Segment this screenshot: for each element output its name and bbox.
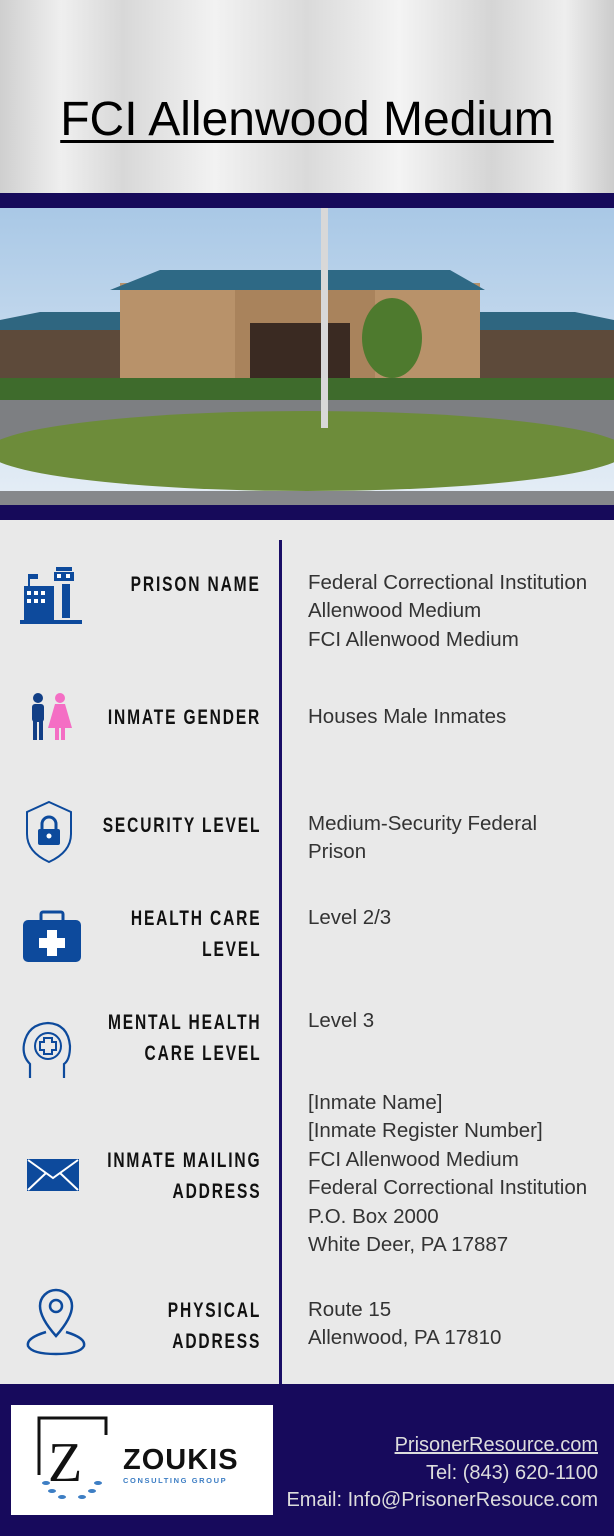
label: physical address bbox=[168, 1299, 261, 1353]
label: mental health care level: CARE LEVEL bbox=[144, 1042, 261, 1065]
value: mailing address: FCI Allenwood Medium bbox=[308, 1148, 519, 1171]
value: mental health: Level 3 bbox=[308, 1009, 374, 1032]
contact info: PrisonerResource.com bbox=[395, 1434, 598, 1456]
icon: envelope bbox=[27, 1159, 79, 1191]
logo emblem: Z bbox=[48, 1432, 82, 1494]
icon: mental health head bbox=[22, 1022, 72, 1078]
contact info: Email: Info@PrisonerResouce.com bbox=[286, 1489, 598, 1511]
label: inmate gender: INMATE GENDER bbox=[108, 706, 261, 729]
logo box bbox=[11, 1405, 273, 1515]
value: mailing address: Federal Correctional Institution bbox=[308, 1176, 587, 1199]
label: health care level: HEALTH CARE bbox=[130, 907, 261, 930]
value: physical address: Route 15 bbox=[308, 1298, 391, 1321]
icon: gender bbox=[32, 693, 72, 740]
value: physical address: Allenwood, PA 17810 bbox=[308, 1326, 501, 1349]
contact info bbox=[286, 1434, 598, 1511]
label: health care level bbox=[130, 907, 261, 961]
value: mailing address: [Inmate Register Number] bbox=[308, 1119, 543, 1142]
icon: medical kit bbox=[23, 910, 81, 962]
label: inmate mailing address: ADDRESS bbox=[172, 1180, 261, 1203]
value: mailing address: P.O. Box 2000 bbox=[308, 1205, 439, 1228]
logo text: ZOUKIS bbox=[123, 1444, 239, 1476]
icon: shield lock bbox=[26, 800, 72, 864]
label: physical address: PHYSICAL bbox=[168, 1299, 261, 1322]
logo emblem bbox=[38, 1416, 108, 1499]
value: health care: Level 2/3 bbox=[308, 906, 391, 929]
label: security level: SECURITY LEVEL bbox=[102, 814, 261, 837]
label: mental health care level: MENTAL HEALTH bbox=[107, 1011, 261, 1034]
title: FCI Allenwood Medium bbox=[60, 93, 554, 146]
value: gender: Houses Male Inmates bbox=[308, 705, 506, 728]
footer bbox=[0, 1384, 614, 1536]
label: inmate mailing address bbox=[107, 1149, 261, 1203]
value: mailing address: White Deer, PA 17887 bbox=[308, 1233, 508, 1256]
value: security bbox=[308, 812, 537, 863]
icon: prison building bbox=[20, 567, 82, 624]
contact info: Tel: (843) 620-1100 bbox=[426, 1462, 598, 1484]
label: inmate mailing address: INMATE MAILING bbox=[107, 1149, 261, 1172]
header: columns background bbox=[0, 0, 614, 194]
label: prison name: PRISON NAME bbox=[131, 573, 261, 596]
value: physical address bbox=[308, 1298, 501, 1349]
label: physical address: ADDRESS bbox=[172, 1330, 261, 1353]
logo box: CONSULTING GROUP bbox=[123, 1476, 227, 1485]
value: mailing address: [Inmate Name] bbox=[308, 1091, 442, 1114]
value: prison name: FCI Allenwood Medium bbox=[308, 628, 519, 651]
label: mental health care level bbox=[107, 1011, 261, 1065]
photo: prison building bbox=[0, 208, 614, 505]
value: security: Prison bbox=[308, 840, 366, 863]
divider line bbox=[279, 540, 282, 1384]
value: security: Medium-Security Federal bbox=[308, 812, 537, 835]
value: mailing address bbox=[308, 1091, 587, 1256]
label: health care level: LEVEL bbox=[202, 938, 261, 961]
value: prison name: Allenwood Medium bbox=[308, 599, 481, 622]
icon: location pin bbox=[26, 1288, 86, 1356]
value: prison name bbox=[308, 571, 587, 651]
value: prison name: Federal Correctional Institution bbox=[308, 571, 587, 594]
